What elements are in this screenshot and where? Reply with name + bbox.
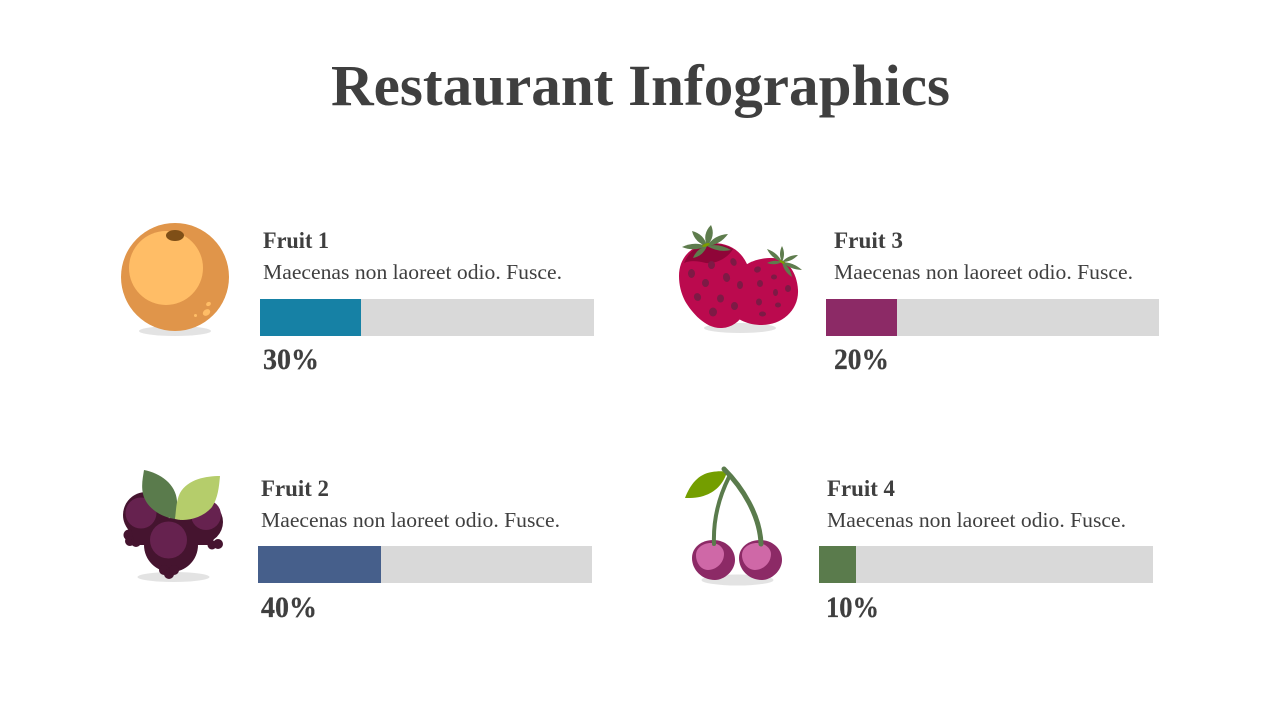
icon: cherries: [685, 469, 782, 586]
panel: fruit 4: [685, 469, 1153, 624]
text: fruit 1 description: Maecenas non laoreet odio. Fusce.: [263, 260, 562, 284]
value: fruit 1 percent: 30%: [263, 343, 319, 376]
bar: fruit 4 progress: [819, 546, 1153, 583]
value: fruit 4 percent: 10%: [826, 591, 879, 624]
panel: fruit 2: [123, 470, 592, 624]
heading: fruit 4: Fruit 4: [827, 476, 895, 501]
icon: berries: [123, 470, 223, 582]
heading: fruit 2: Fruit 2: [261, 476, 329, 501]
value: fruit 3 percent: 20%: [834, 343, 889, 376]
heading: fruit 3: Fruit 3: [834, 228, 903, 253]
value: fruit 2 percent: 40%: [261, 591, 317, 624]
bar: fruit 2 progress: [258, 546, 592, 583]
panel: fruit 3: [679, 225, 1159, 376]
bar: fruit 3 progress: [826, 299, 1159, 336]
text: fruit 3 description: Maecenas non laoreet odio. Fusce.: [834, 260, 1133, 284]
icon: orange: [121, 223, 229, 336]
heading: fruit 1: Fruit 1: [263, 228, 329, 253]
bar: fruit 1 progress: [260, 299, 594, 336]
text: fruit 2 description: Maecenas non laoreet odio. Fusce.: [261, 508, 560, 532]
text: fruit 4 description: Maecenas non laoreet odio. Fusce.: [827, 508, 1126, 532]
icon: strawberries: [679, 225, 802, 333]
panel: fruit 1: [121, 223, 594, 376]
title: Restaurant Infographics: [331, 53, 950, 118]
